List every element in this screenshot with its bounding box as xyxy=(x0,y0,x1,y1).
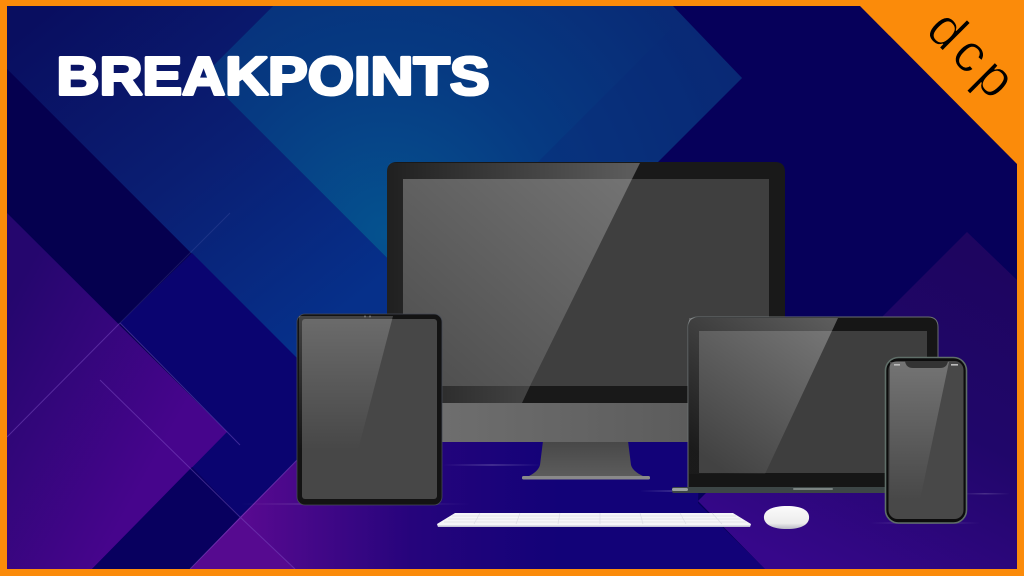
icon: mouse xyxy=(764,506,809,529)
icon: tablet xyxy=(297,314,442,505)
monitor chin xyxy=(387,400,785,442)
corner ribbon xyxy=(860,6,1017,164)
icon: laptop xyxy=(672,317,938,493)
title: BREAKPOINTS xyxy=(56,46,489,106)
icon: desktop monitor xyxy=(387,162,785,480)
floor glow lines xyxy=(240,464,1010,524)
icon: keyboard xyxy=(437,513,751,527)
icon: smartphone xyxy=(886,358,966,523)
monitor stand xyxy=(522,441,650,479)
monitor bezel and screen xyxy=(387,162,785,403)
monitor screen glare xyxy=(403,179,632,386)
